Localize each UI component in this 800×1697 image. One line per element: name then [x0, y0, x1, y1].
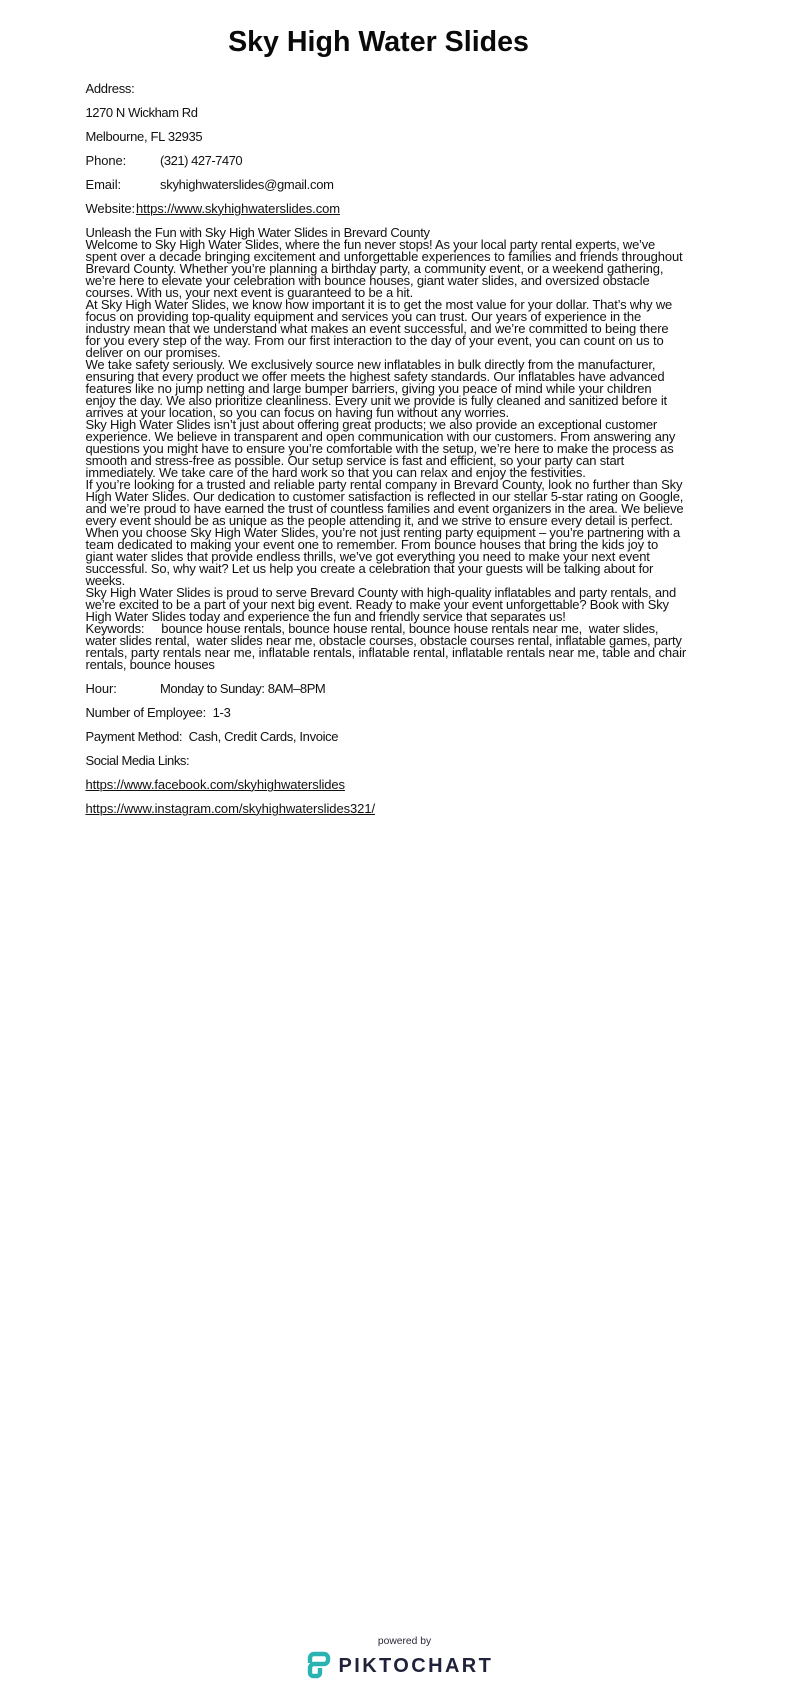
text block: description: Unleash the Fun with Sky High Water Slides in Brevard County	[86, 225, 430, 240]
text block: description: At Sky High Water Slides, we know how important it is to get the most value for your dollar. That’s why we	[86, 297, 672, 312]
text block: description: We take safety seriously. We exclusively source new inflatables in bulk directly from the manufacturer,	[86, 357, 655, 372]
text block: description: for you every step of the way. From our first interaction to the day of your event, you can count on us to	[86, 333, 664, 348]
contact: website: https://www.skyhighwaterslides.com	[136, 201, 340, 216]
text block: description: rentals, party rentals near me, inflatable rentals, inflatable rental, inflatable rentals near me, table and chair	[86, 645, 686, 660]
text block: description: successful. So, why wait? Let us help you create a celebration that your guests will be talking about for	[86, 561, 653, 576]
contact: email: skyhighwaterslides@gmail.com	[160, 177, 334, 192]
text block: description: team dedicated to making your event one to remember. From bounce houses that bring the kids joy to	[86, 537, 658, 552]
contact: email: Email:	[86, 177, 121, 192]
text block: description: ensuring that every product we offer meets the highest safety standards. Our inflatables have advanced	[86, 369, 664, 384]
contact: city: Melbourne, FL 32935	[86, 129, 202, 144]
text block: description: we’re here to elevate your celebration with bounce houses, giant water slides, and oversized obstacle	[86, 273, 649, 288]
powered by text: powered by	[378, 1636, 431, 1647]
piktochart wordmark: PIKTOCHART	[338, 1655, 493, 1677]
text block: description: industry mean that we understand what makes an event successful, and we’re committed to being there	[86, 321, 669, 336]
text block: description: spent over a decade bringing excitement and unforgettable experiences to families and friends throughout	[86, 249, 683, 264]
footer: piktochart branding	[308, 1636, 493, 1678]
facebook link: https://www.facebook.com/skyhighwaterslides	[86, 777, 345, 792]
icon: piktochart logo	[308, 1652, 330, 1678]
text block: description: questions you might have to ensure you’re comfortable with the setup, we’re here to make the process as	[86, 441, 674, 456]
text block: description: Brevard County. Whether you’re planning a birthday party, a community event, or a weekend gathering,	[86, 261, 663, 276]
text block: description: experience. We believe in transparent and open communication with our customers. From answering any	[86, 429, 675, 444]
business hours: Monday to Sunday: 8AM–8PM	[160, 681, 325, 696]
text block: description: rentals, bounce houses	[86, 657, 215, 672]
contact: address label: Address:	[86, 81, 134, 96]
contact: email	[86, 177, 334, 192]
number of employees: Number of Employee: 1-3	[86, 705, 231, 720]
text block: description: Sky High Water Slides isn’t just about offering great products; we also provide an exceptional customer	[86, 417, 657, 432]
text block: description: features like no jump netting and large bumper barriers, giving you peace of mind while your children	[86, 381, 651, 396]
text block: description: arrives at your location, so you can focus on having fun without any worries.	[86, 405, 509, 420]
text block: description	[86, 225, 686, 672]
contact: phone: Phone:	[86, 153, 126, 168]
payment method: Payment Method: Cash, Credit Cards, Invoice	[86, 729, 338, 744]
text block: description: and we’re proud to have earned the trust of countless families and event organizers in the area. We believe	[86, 501, 684, 516]
text block: description: focus on providing top-quality equipment and services you can trust. Our years of experience in the	[86, 309, 641, 324]
contact: website: Website:	[86, 201, 135, 216]
text block: description: smooth and stress-free as possible. Our setup service is fast and efficient, so your party can start	[86, 453, 624, 468]
text block: description: Welcome to Sky High Water Slides, where the fun never stops! As your local party rental experts, we’ve	[86, 237, 655, 252]
instagram link: https://www.instagram.com/skyhighwaterslides321/	[86, 801, 375, 816]
text block: description: High Water Slides. Our dedication to customer satisfaction is reflected in our stellar 5-star rating on Google,	[86, 489, 683, 504]
contact: phone: (321) 427-7470	[160, 153, 242, 168]
text block: description: When you choose Sky High Water Slides, you’re not just renting party equipment – you’re partnering with a	[86, 525, 680, 540]
business hours: Hour:	[86, 681, 117, 696]
contact: street: 1270 N Wickham Rd	[86, 105, 198, 120]
text block: description: deliver on our promises.	[86, 345, 221, 360]
business hours	[86, 681, 325, 696]
text block: description: Keywords: bounce house rentals, bounce house rental, bounce house rentals near me, water slides,	[86, 621, 658, 636]
text block: description: Sky High Water Slides is proud to serve Brevard County with high-quality inflatables and party rentals, and	[86, 585, 676, 600]
text block: description: If you’re looking for a trusted and reliable party rental company in Brevard County, look no further than Sky	[86, 477, 682, 492]
title: Sky High Water Slides	[228, 26, 529, 58]
text block: description: courses. With us, your next event is guaranteed to be a hit.	[86, 285, 413, 300]
text block: description: weeks.	[86, 573, 125, 588]
text block: description: enjoy the day. We also prioritize cleanliness. Every unit we provide is fully cleaned and sanitized before it	[86, 393, 667, 408]
text block: description: immediately. We take care of the hard work so that you can relax and enjoy the festivities.	[86, 465, 586, 480]
text block: description: High Water Slides today and experience the fun and friendly service that separates us!	[86, 609, 566, 624]
contact: phone	[86, 153, 242, 168]
text block: description: water slides rental, water slides near me, obstacle courses, obstacle courses rental, inflatable games, party	[86, 633, 682, 648]
text block: description: every event should be as unique as the people attending it, and we strive to ensure every detail is perfect.	[86, 513, 673, 528]
text block: description: we’re excited to be a part of your next big event. Ready to make your event unforgettable? Book with Sky	[86, 597, 669, 612]
social media label: Social Media Links:	[86, 753, 189, 768]
text block: description: giant water slides that provide endless thrills, we’ve got everything you need to make your next event	[86, 549, 650, 564]
